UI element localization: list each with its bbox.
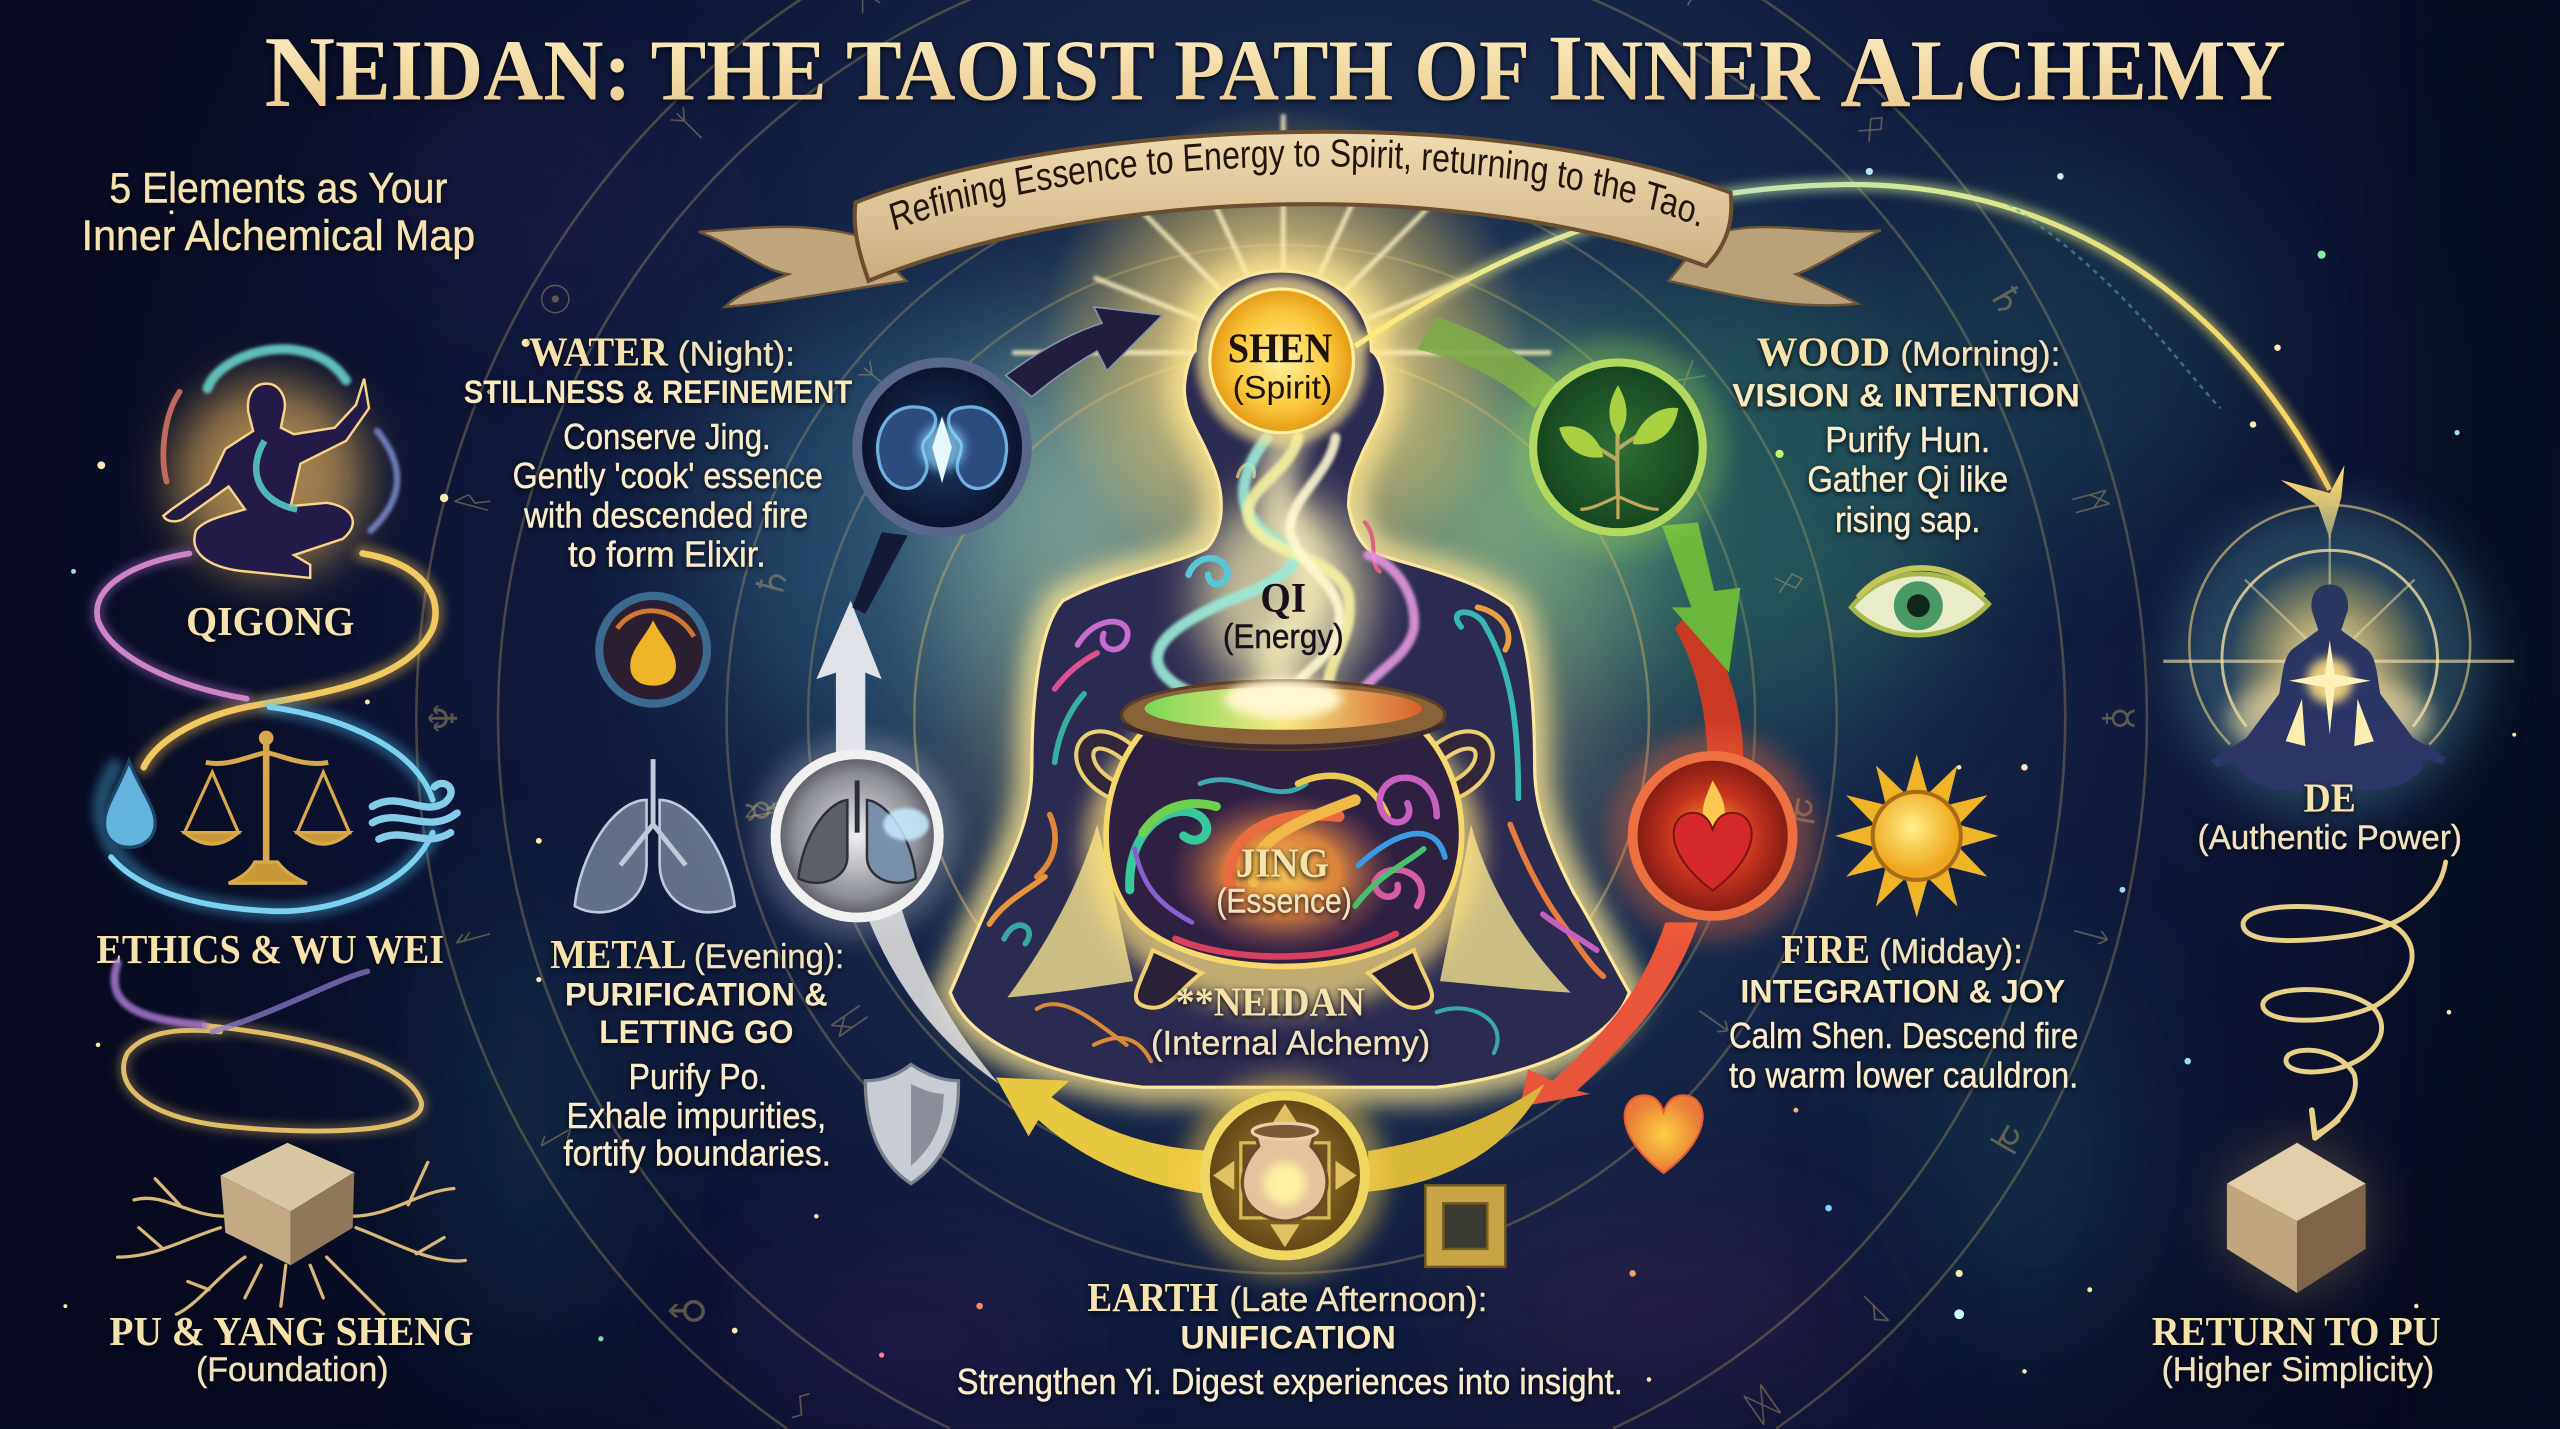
Fire text block: INTEGRATION & JOY <box>1740 972 2065 1009</box>
zodiac wheel rings and glyphs: ᚱ <box>739 794 787 825</box>
icon: small heart <box>1625 1095 1703 1173</box>
Qi label: (Energy) <box>1223 618 1344 656</box>
zodiac wheel rings and glyphs: ᛗ <box>2065 485 2115 519</box>
left column: foundation swirl <box>115 963 422 1131</box>
zodiac wheel rings and glyphs: ♄ <box>747 559 799 605</box>
subtitle: 5 Elements as Your <box>109 164 447 211</box>
Water text block: Conserve Jing. <box>563 416 771 457</box>
title: LCHEMY <box>1911 23 2286 119</box>
Neidan label: (Internal Alchemy) <box>1151 1025 1430 1063</box>
zodiac wheel rings and glyphs: ᛞ <box>1739 1379 1784 1429</box>
chest glow <box>1198 495 1368 697</box>
zodiac wheel rings and glyphs: ☿ <box>2096 706 2141 730</box>
title: EIDAN: THE TAOIST PATH OF <box>335 23 1548 119</box>
title: INNER <box>1548 17 1828 121</box>
Earth text block: UNIFICATION <box>1180 1319 1396 1356</box>
title: N <box>265 16 335 128</box>
De label: DE <box>2304 775 2356 820</box>
icon: eye <box>1851 568 1989 635</box>
Fire text block: FIRE <box>1781 927 1879 972</box>
spiral arrow to cube <box>2243 862 2446 1138</box>
zodiac wheel rings and glyphs: ♃ <box>1978 1110 2035 1163</box>
zodiac wheel rings and glyphs: ᛟ <box>1766 565 1815 599</box>
Wood text block: (Morning): <box>1900 336 2060 374</box>
Fire text block: Calm Shen. Descend fire <box>1729 1015 2078 1056</box>
Wood text block: VISION & INTENTION <box>1732 377 2080 414</box>
Earth text block: Strengthen Yi. Digest experiences into insight. <box>957 1361 1623 1402</box>
icon: shield <box>865 1064 958 1184</box>
zodiac wheel rings and glyphs: ᚱ <box>448 485 498 519</box>
zodiac wheel rings and glyphs: ᛟ <box>1849 102 1898 151</box>
zodiac wheel rings and glyphs: ☿ <box>739 794 787 826</box>
zodiac wheel rings and glyphs: ᛗ <box>825 998 875 1043</box>
Metal circle with lungs <box>756 735 958 937</box>
cauldron <box>1085 679 1484 1008</box>
Fire text block: to warm lower cauldron. <box>1729 1054 2078 1095</box>
Water text block: WATER <box>529 330 678 375</box>
Wood text block: WOOD <box>1757 330 1900 375</box>
Fire circle with heart <box>1608 731 1817 940</box>
Earth circle with jar <box>1184 1074 1386 1277</box>
Water circle with kidneys <box>857 362 1027 532</box>
Water text block: STILLNESS & REFINEMENT <box>464 373 852 410</box>
zodiac wheel rings and glyphs: ♆ <box>422 701 467 736</box>
Wood text block: Purify Hun. <box>1825 419 1990 460</box>
zodiac wheel rings and glyphs: ♄ <box>1978 273 2035 326</box>
glow gaps between arms and cauldron <box>1007 824 1571 998</box>
icon: air waves <box>372 783 457 839</box>
Qi label: QI <box>1260 575 1306 622</box>
left column: Qigong figure <box>163 349 397 578</box>
arrow: Metal tail (white) <box>865 908 999 1084</box>
Return to Pu label: RETURN TO PU <box>2152 1309 2441 1354</box>
arrow: Shen to Wood (green) <box>1417 317 1561 408</box>
icon: return cube <box>2219 1138 2375 1295</box>
zodiac wheel rings and glyphs: ♃ <box>1775 789 1826 831</box>
Wood text block: rising sap. <box>1835 499 1980 540</box>
Water text block: with descended fire <box>523 494 808 535</box>
Metal text block: LETTING GO <box>599 1013 793 1050</box>
zodiac wheel rings and glyphs: ♂ <box>661 1282 718 1338</box>
Wood circle with sprout <box>1510 340 1726 555</box>
icon: sun <box>1835 754 1998 918</box>
Metal text block: Exhale impurities, <box>567 1095 826 1136</box>
zodiac wheel rings and glyphs: ☉ <box>529 273 585 326</box>
Pu and Yang Sheng label: (Foundation) <box>196 1351 389 1389</box>
body swirls <box>989 464 1603 1061</box>
De figure with halo <box>2163 505 2514 816</box>
Qigong label: QIGONG <box>186 599 354 644</box>
zodiac wheel rings and glyphs: ᛇ <box>531 1115 582 1158</box>
De label: (Authentic Power) <box>2198 819 2462 857</box>
Wood text block: Gather Qi like <box>1807 458 2008 499</box>
Metal text block: METAL <box>550 932 694 977</box>
arrow: Earth side swoosh (gold) <box>1368 1084 1544 1192</box>
banner text: Refining Essence to Energy to Spirit, returning to the Tao. <box>889 139 1700 230</box>
icon: elixir drop <box>599 596 707 704</box>
Earth text block: (Late Afternoon): <box>1229 1281 1487 1319</box>
icon: balance scales <box>185 732 349 883</box>
arrow: Wood to Fire (green into red) <box>1662 522 1744 767</box>
icon: water drop <box>105 761 155 847</box>
Return to Pu label: (Higher Simplicity) <box>2162 1351 2434 1389</box>
arrow: Earth to Metal (gold) <box>996 1078 1216 1195</box>
Jing label: JING <box>1236 841 1329 886</box>
left column: ethics ring <box>101 707 433 911</box>
zodiac wheel rings and glyphs: ᚨ <box>448 918 498 952</box>
zodiac wheel rings and glyphs: ᚹ <box>1849 1286 1898 1334</box>
icon: translucent lungs <box>575 759 735 912</box>
Metal text block: fortify boundaries. <box>563 1133 831 1174</box>
zodiac wheel rings and glyphs: ᛊ <box>779 1379 824 1429</box>
zodiac wheel rings and glyphs: ᛉ <box>666 102 714 151</box>
De silhouette <box>2211 584 2446 790</box>
banner <box>698 130 1882 308</box>
Jing label: (Essence) <box>1216 883 1352 921</box>
icon: earth square <box>1425 1185 1505 1267</box>
Shen label: (Spirit) <box>1233 368 1332 405</box>
cauldron halo <box>1084 686 1482 1012</box>
Ethics label: ETHICS & WU WEI <box>96 927 444 972</box>
Neidan label: **NEIDAN <box>1176 979 1365 1024</box>
Fire text block: (Midday): <box>1879 933 2023 971</box>
Water text block: (Night): <box>678 336 795 374</box>
big arc arrow: Shen to De <box>1355 184 2344 539</box>
Water text block: Gently 'cook' essence <box>513 455 823 496</box>
steam of Qi rising <box>1157 438 1414 705</box>
arrow: Water to Shen (dark) <box>1006 307 1162 397</box>
title: A <box>1840 16 1911 128</box>
left column: swirl around Qigong <box>97 553 436 767</box>
Shen glow and rays <box>1012 106 1551 596</box>
zodiac wheel rings and glyphs: ᛏ <box>1688 998 1738 1043</box>
subtitle: Inner Alchemical Map <box>82 212 475 259</box>
Shen orb <box>1197 276 1367 446</box>
icon: foundation cube with roots <box>118 1143 465 1314</box>
central figure: meditating body with glowing outline <box>950 271 1629 1087</box>
arrow: Metal to Water (white) <box>816 532 908 758</box>
zodiac wheel rings and glyphs: ᛉ <box>853 356 903 403</box>
Metal text block: (Evening): <box>694 938 844 976</box>
zodiac wheel rings and glyphs <box>416 0 2147 1429</box>
Earth text block: EARTH <box>1087 1275 1228 1320</box>
Metal text block: Purify Po. <box>629 1056 767 1097</box>
Metal text block: PURIFICATION & <box>565 976 828 1013</box>
Water text block: to form Elixir. <box>568 534 766 575</box>
zodiac wheel rings and glyphs: ᚷ <box>1660 356 1710 403</box>
arrow: Fire to Earth (red) <box>1520 922 1698 1107</box>
Shen label: SHEN <box>1228 325 1333 372</box>
zodiac wheel rings and glyphs: ᛏ <box>2065 918 2115 952</box>
Pu and Yang Sheng label: PU & YANG SHENG <box>109 1309 474 1354</box>
